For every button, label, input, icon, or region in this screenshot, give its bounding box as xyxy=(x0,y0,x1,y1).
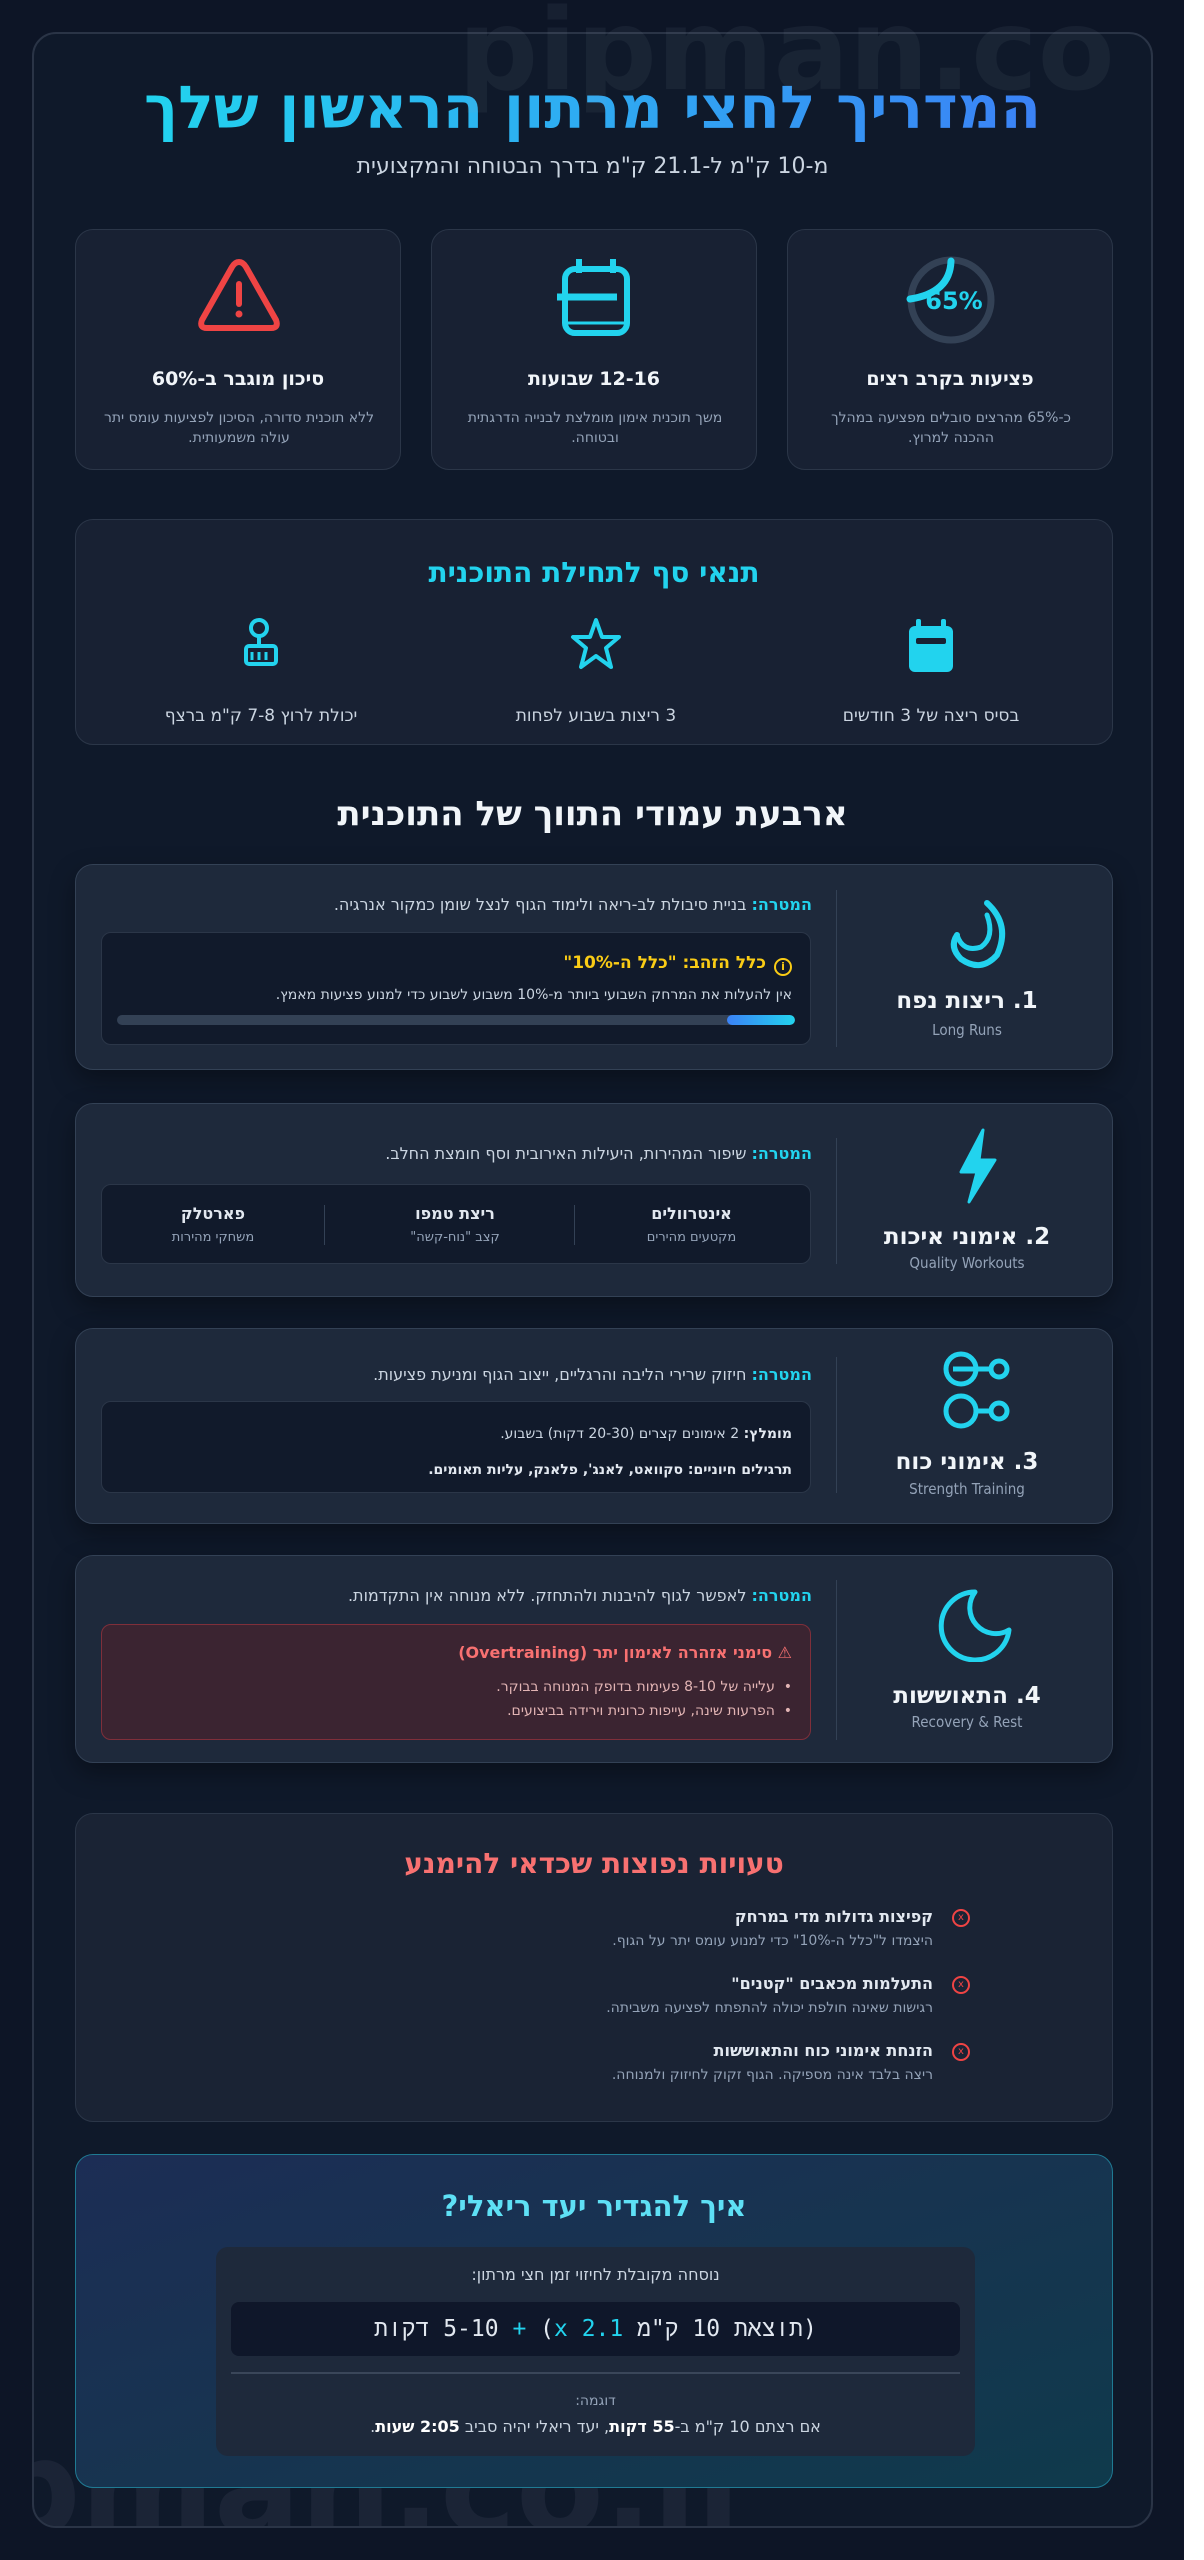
mistake 1: קפיצות גדולות מדי במרחק xyxy=(735,1907,933,1926)
icon: runner xyxy=(244,618,278,666)
panel: common mistakes: x xyxy=(958,1912,964,1923)
item: tempo xyxy=(410,1204,500,1245)
pillar subtitle: Strength Training xyxy=(909,1480,1025,1498)
pillar 2: quality workouts xyxy=(75,1103,1113,1297)
prereq item: 7-8 km xyxy=(165,618,357,726)
icon: warning triangle xyxy=(198,259,280,331)
stat desc: משך תוכנית אימון מומלצת לבנייה הדרגתית ובטוחה. xyxy=(468,410,722,446)
prereq item: 3 runs a week xyxy=(516,618,676,726)
mistake 2: התעלמות מכאבים "קטנים" xyxy=(731,1974,933,1993)
goal text: המטרה: חיזוק שרירי הליבה והרגליים, ייצוב הגוף ומניעת פציעות. xyxy=(373,1365,812,1384)
stat title: 12-16 שבועות xyxy=(528,368,660,390)
goal text: המטרה: שיפור המהירות, היעילות האירובית וסף חומצת החלב. xyxy=(385,1144,812,1163)
panel: common mistakes: x xyxy=(958,1979,964,1990)
mistake 1 xyxy=(612,1907,970,1949)
item: fartlek: פארטלק xyxy=(181,1204,245,1223)
icon: strength rings xyxy=(944,1352,1010,1428)
pillar 3: strength xyxy=(75,1328,1113,1524)
stat cards xyxy=(75,229,1113,470)
mistake 3: הזנחת אימוני כוח והתאוששות xyxy=(714,2041,933,2060)
mistake 2: רגישות שאינה חולפת יכולה להתפתח לפציעה משביתה. xyxy=(606,2000,933,2016)
panel: common mistakes: x xyxy=(958,2046,964,2057)
prereq item: 7-8 km: יכולת לרוץ 7-8 ק"מ ברצף xyxy=(165,706,357,726)
stat title: פציעות בקרב רצים xyxy=(866,368,1034,390)
panel: prerequisites xyxy=(75,519,1113,745)
panel: common mistakes xyxy=(75,1813,1113,2122)
callout: overtraining warning: • עלייה של 8-10 פעימות בדופק המנוחה בבוקר. xyxy=(496,1679,792,1695)
goal text: המטרה: לאפשר לגוף להיבנות ולהתחזק. ללא מנוחה אין התקדמות. xyxy=(348,1586,812,1605)
title: המדריך לחצי מרתון הראשון שלך xyxy=(144,73,1041,142)
formula box xyxy=(216,2247,975,2456)
prereq item: 3 runs a week: 3 ריצות בשבוע לפחות xyxy=(516,706,676,726)
mistakes title: טעויות נפוצות שכדאי להימנע xyxy=(404,1847,784,1880)
prereq title: תנאי סף לתחילת התוכנית xyxy=(428,556,760,589)
icon: 65% ring: 65% xyxy=(925,287,983,315)
pillar 4: recovery xyxy=(75,1555,1113,1763)
item: tempo: קצב "נוח-קשה" xyxy=(410,1230,500,1245)
item: fartlek xyxy=(172,1204,254,1245)
prereq item: 3 months: בסיס ריצה של 3 חודשים xyxy=(843,706,1019,726)
pillar title: 1. ריצות נפח xyxy=(896,988,1038,1014)
pillar title: 2. אימוני איכות xyxy=(884,1224,1050,1250)
callout: 10% rule: אין להעלות את המרחק השבועי ביותר מ-10% משבוע לשבוע כדי למנוע פציעות מאמץ. xyxy=(276,987,792,1003)
mistake 3: ריצה בלבד אינה מספיקה. הגוף זקוק לחיזוק ולמנוחה. xyxy=(612,2067,933,2083)
goal title: איך להגדיר יעד ריאלי? xyxy=(441,2189,747,2223)
pillar subtitle: Long Runs xyxy=(932,1021,1002,1039)
callout: 10% rule: i xyxy=(781,960,785,973)
icon: lightning xyxy=(959,1128,997,1204)
item: intervals: אינטרוולים xyxy=(651,1204,732,1223)
formula box: נוסחה מקובלת לחיזוי זמן חצי מרתון: xyxy=(471,2265,720,2284)
item: tempo: ריצת טמפו xyxy=(415,1204,495,1223)
stat desc: ללא תוכנית סדורה, הסיכון לפציעות עומס יתר עולה משמעותית. xyxy=(104,410,374,446)
recommendation box xyxy=(101,1401,811,1493)
callout: overtraining warning: ⚠ סימני אזהרה לאימון יתר (Overtraining) xyxy=(458,1643,792,1662)
formula box: דוגמה: xyxy=(575,2393,616,2409)
icon: moon xyxy=(938,1590,1012,1662)
recommendation box: תרגילים חיוניים: סקוואט, לאנג', פלאנק, עליות תאומים. xyxy=(428,1462,792,1478)
callout: overtraining warning xyxy=(101,1624,811,1740)
panel: realistic goal xyxy=(75,2154,1113,2488)
callout: overtraining warning: • הפרעות שינה, עייפות כרונית וירידה בביצועים. xyxy=(507,1703,792,1719)
stat desc: כ-65% מהרצים סובלים מפציעה במהלך ההכנה למרוץ. xyxy=(831,410,1071,446)
formula xyxy=(231,2302,960,2356)
icon: calendar xyxy=(557,259,630,336)
recommendation box: מומלץ: 2 אימונים קצרים (20-30 דקות) בשבוע. xyxy=(500,1426,792,1442)
item: intervals: מקטעים מהירים xyxy=(647,1230,736,1245)
stat card: 12-16 weeks xyxy=(431,229,757,470)
prereq item: 3 months xyxy=(843,619,1019,726)
icon: 65% ring xyxy=(906,256,994,344)
pillar subtitle: Recovery & Rest xyxy=(912,1713,1022,1731)
formula: (תוצאת 10 ק"מ x 2.1) + 5-10 דקות xyxy=(374,2316,817,2342)
progress bar xyxy=(117,1015,795,1025)
pillar title: 4. התאוששות xyxy=(893,1683,1041,1709)
pillar 1: long runs xyxy=(75,864,1113,1070)
item: intervals xyxy=(647,1204,736,1245)
pillar subtitle: Quality Workouts xyxy=(909,1254,1025,1272)
subtitle: מ-10 ק"מ ל-21.1 ק"מ בדרך הבטוחה והמקצועית xyxy=(357,154,828,179)
stat card: risk 60% xyxy=(75,229,401,470)
pillar title: 3. אימוני כוח xyxy=(896,1449,1038,1475)
icon: calendar filled xyxy=(909,619,953,672)
item: fartlek: משחקי מהירות xyxy=(172,1230,254,1245)
stat card: injuries 65% xyxy=(787,229,1113,470)
callout: 10% rule: כלל הזהב: "כלל ה-10%" xyxy=(563,953,766,973)
icon: star xyxy=(570,618,621,670)
mistake 3 xyxy=(612,2041,970,2083)
stat title: סיכון מוגבר ב-60% xyxy=(152,368,324,390)
mistake 1: היצמדו ל"כלל ה-10%" כדי למנוע עומס יתר על הגוף. xyxy=(612,1933,933,1949)
callout: 10% rule xyxy=(101,932,811,1045)
icon: spiral xyxy=(950,900,1006,968)
mistake 2 xyxy=(606,1974,970,2016)
example: אם רצתם 10 ק"מ ב-55 דקות, יעד ריאלי יהיה סביב 2:05 שעות. xyxy=(370,2417,821,2436)
goal text: המטרה: בניית סיבולת לב-ריאה ולימוד הגוף לנצל שומן כמקור אנרגיה. xyxy=(334,895,812,914)
section heading: pillars: ארבעת עמודי התווך של התוכנית xyxy=(337,794,848,834)
workout types xyxy=(101,1184,811,1264)
